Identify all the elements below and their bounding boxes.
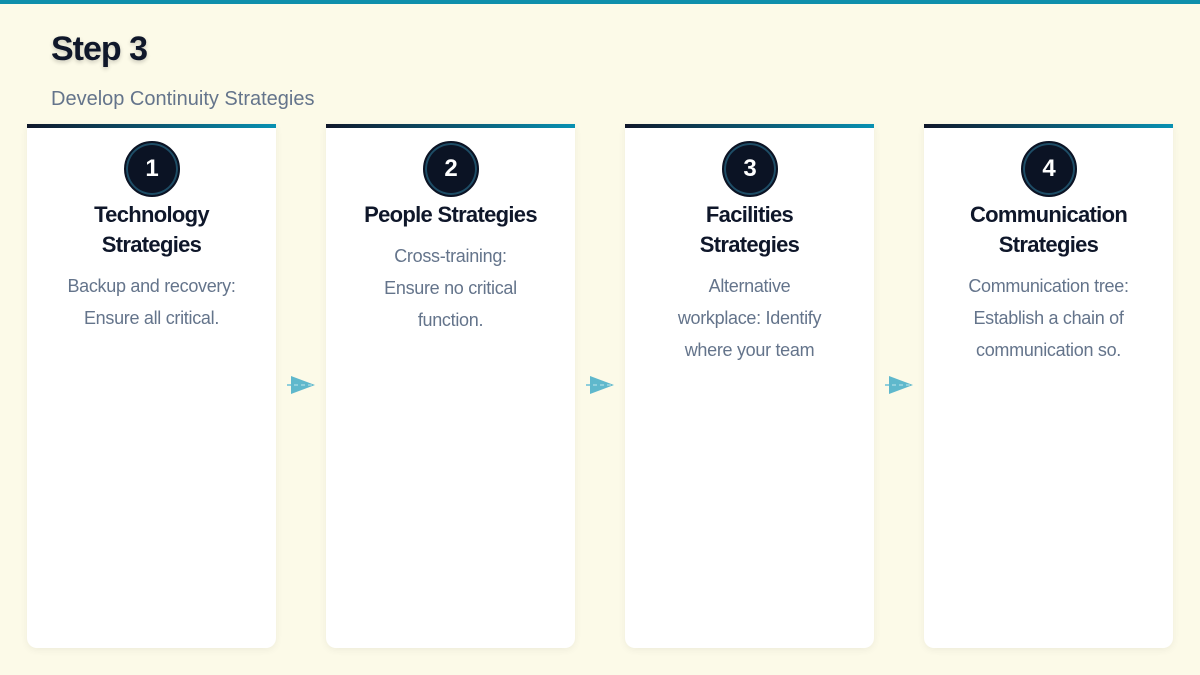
text: Alternative	[709, 276, 790, 296]
text: workplace: Identify	[678, 308, 821, 328]
subtitle: Develop Continuity Strategies	[51, 88, 314, 110]
panel: people	[326, 124, 575, 648]
arrow 1	[287, 376, 315, 394]
heading: Strategies	[999, 232, 1098, 257]
heading	[700, 202, 799, 257]
text: Communication tree:	[968, 276, 1129, 296]
text	[968, 276, 1129, 360]
text: where your team	[685, 340, 814, 360]
panel: facilities	[625, 124, 874, 648]
heading: Technology	[94, 202, 209, 227]
title: Step 3	[51, 30, 147, 68]
text: communication so.	[976, 340, 1121, 360]
text	[678, 276, 822, 360]
text: Ensure all critical.	[84, 308, 219, 328]
heading: Strategies	[700, 232, 799, 257]
heading: People Strategies	[364, 202, 537, 227]
heading: Communication	[970, 202, 1127, 227]
arrow 3	[885, 376, 913, 394]
arrow 2	[586, 376, 614, 394]
badge 3	[722, 141, 778, 197]
heading	[94, 202, 210, 257]
text: function.	[418, 310, 483, 330]
heading	[970, 202, 1127, 257]
heading: Facilities	[706, 202, 793, 227]
badge 4: 4	[1042, 155, 1056, 182]
text: Cross-training:	[394, 246, 507, 266]
badge 4	[1021, 141, 1077, 197]
badge 1: 1	[145, 155, 159, 182]
badge 2: 2	[444, 155, 458, 182]
panel: communication	[924, 124, 1173, 648]
heading: Strategies	[102, 232, 201, 257]
text: Establish a chain of	[973, 308, 1124, 328]
text	[384, 246, 517, 330]
text	[67, 276, 236, 328]
text: Backup and recovery:	[67, 276, 236, 296]
badge 1	[124, 141, 180, 197]
badge 3: 3	[743, 155, 757, 182]
panel: technology	[27, 124, 276, 648]
text: Ensure no critical	[384, 278, 517, 298]
badge 2	[423, 141, 479, 197]
